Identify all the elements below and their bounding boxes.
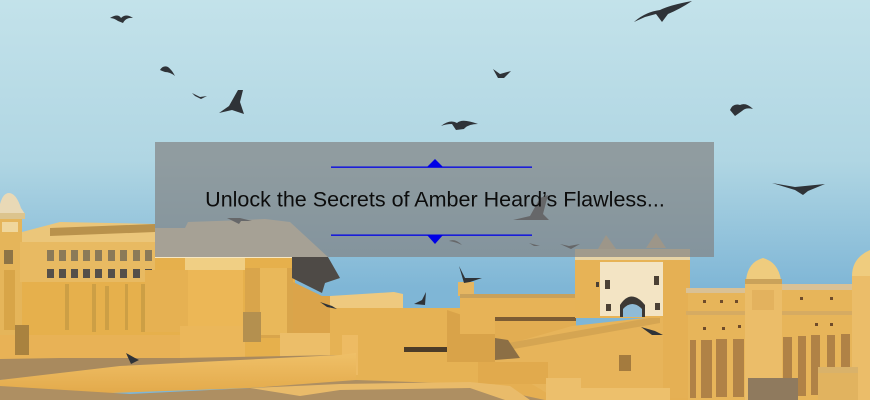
palace: middle walls [330, 233, 700, 400]
title panel [155, 142, 714, 257]
foreground terraces [0, 353, 545, 400]
palace: left wing [0, 193, 346, 365]
birds [110, 1, 825, 364]
bottom divider with triangle [331, 234, 532, 244]
title text: Unlock the Secrets of Amber Heard’s Flawless... [205, 188, 665, 212]
palace: right wing [686, 250, 870, 400]
top divider with triangle [331, 159, 532, 168]
